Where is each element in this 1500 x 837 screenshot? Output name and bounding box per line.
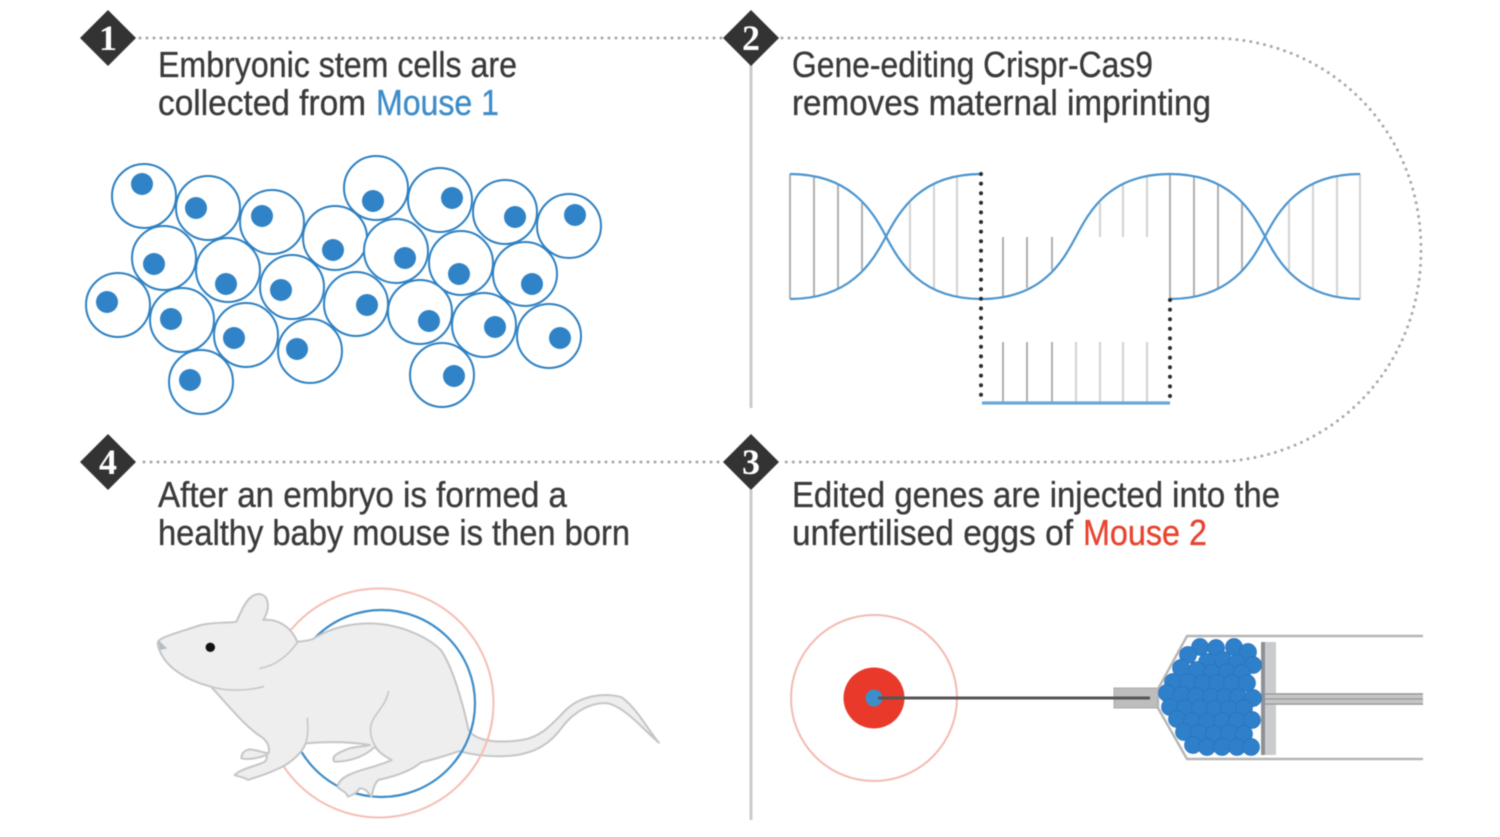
step badge 2: 2 (742, 18, 760, 58)
panel: step 4 baby mouse (80, 434, 659, 818)
step badge 2 (723, 10, 779, 66)
heading: step 2 (792, 44, 1211, 123)
flow connector: dotted path between steps (140, 38, 1421, 820)
heading: step 2: removes maternal imprinting (792, 82, 1211, 123)
heading: step 3 (792, 474, 1280, 553)
heading: step 1: Mouse 1 (376, 82, 499, 123)
step badge 1: 1 (99, 18, 117, 58)
heading: step 1: Embryonic stem cells are (158, 44, 517, 85)
step badge 4: 4 (99, 442, 117, 482)
illustration: mouse (158, 594, 659, 797)
step badge 4 (80, 434, 136, 490)
heading: step 4 (158, 474, 630, 553)
illustration: ring segments over the tail (455, 722, 489, 763)
blue cell mass (1158, 638, 1262, 756)
panel: step 3 injection (723, 434, 1423, 781)
heading: step 4: healthy baby mouse is then born (158, 512, 630, 553)
heading: step 1: collected from (158, 82, 366, 123)
panel: step 1 stem cells (80, 10, 601, 414)
illustration: egg rings behind the mouse (264, 588, 494, 818)
heading: step 4: After an embryo is formed a (158, 474, 568, 515)
step badge 3: 3 (742, 442, 760, 482)
heading: step 3: Mouse 2 (1083, 512, 1207, 553)
step badge 3 (723, 434, 779, 490)
illustration: DNA helix with removed section (790, 174, 1360, 403)
heading: step 2: Gene-editing Crispr-Cas9 (792, 44, 1153, 85)
heading: step 1 (158, 44, 517, 123)
illustration: unfertilised egg (791, 615, 957, 781)
panel: step 2 gene editing (723, 10, 1360, 403)
heading: step 3: Edited genes are injected into the (792, 474, 1280, 515)
illustration: cluster of embryonic stem cells (86, 156, 601, 414)
step badge 1 (80, 10, 136, 66)
heading: step 3: unfertilised eggs of (792, 512, 1074, 553)
illustration: syringe with edited genes (878, 636, 1423, 759)
